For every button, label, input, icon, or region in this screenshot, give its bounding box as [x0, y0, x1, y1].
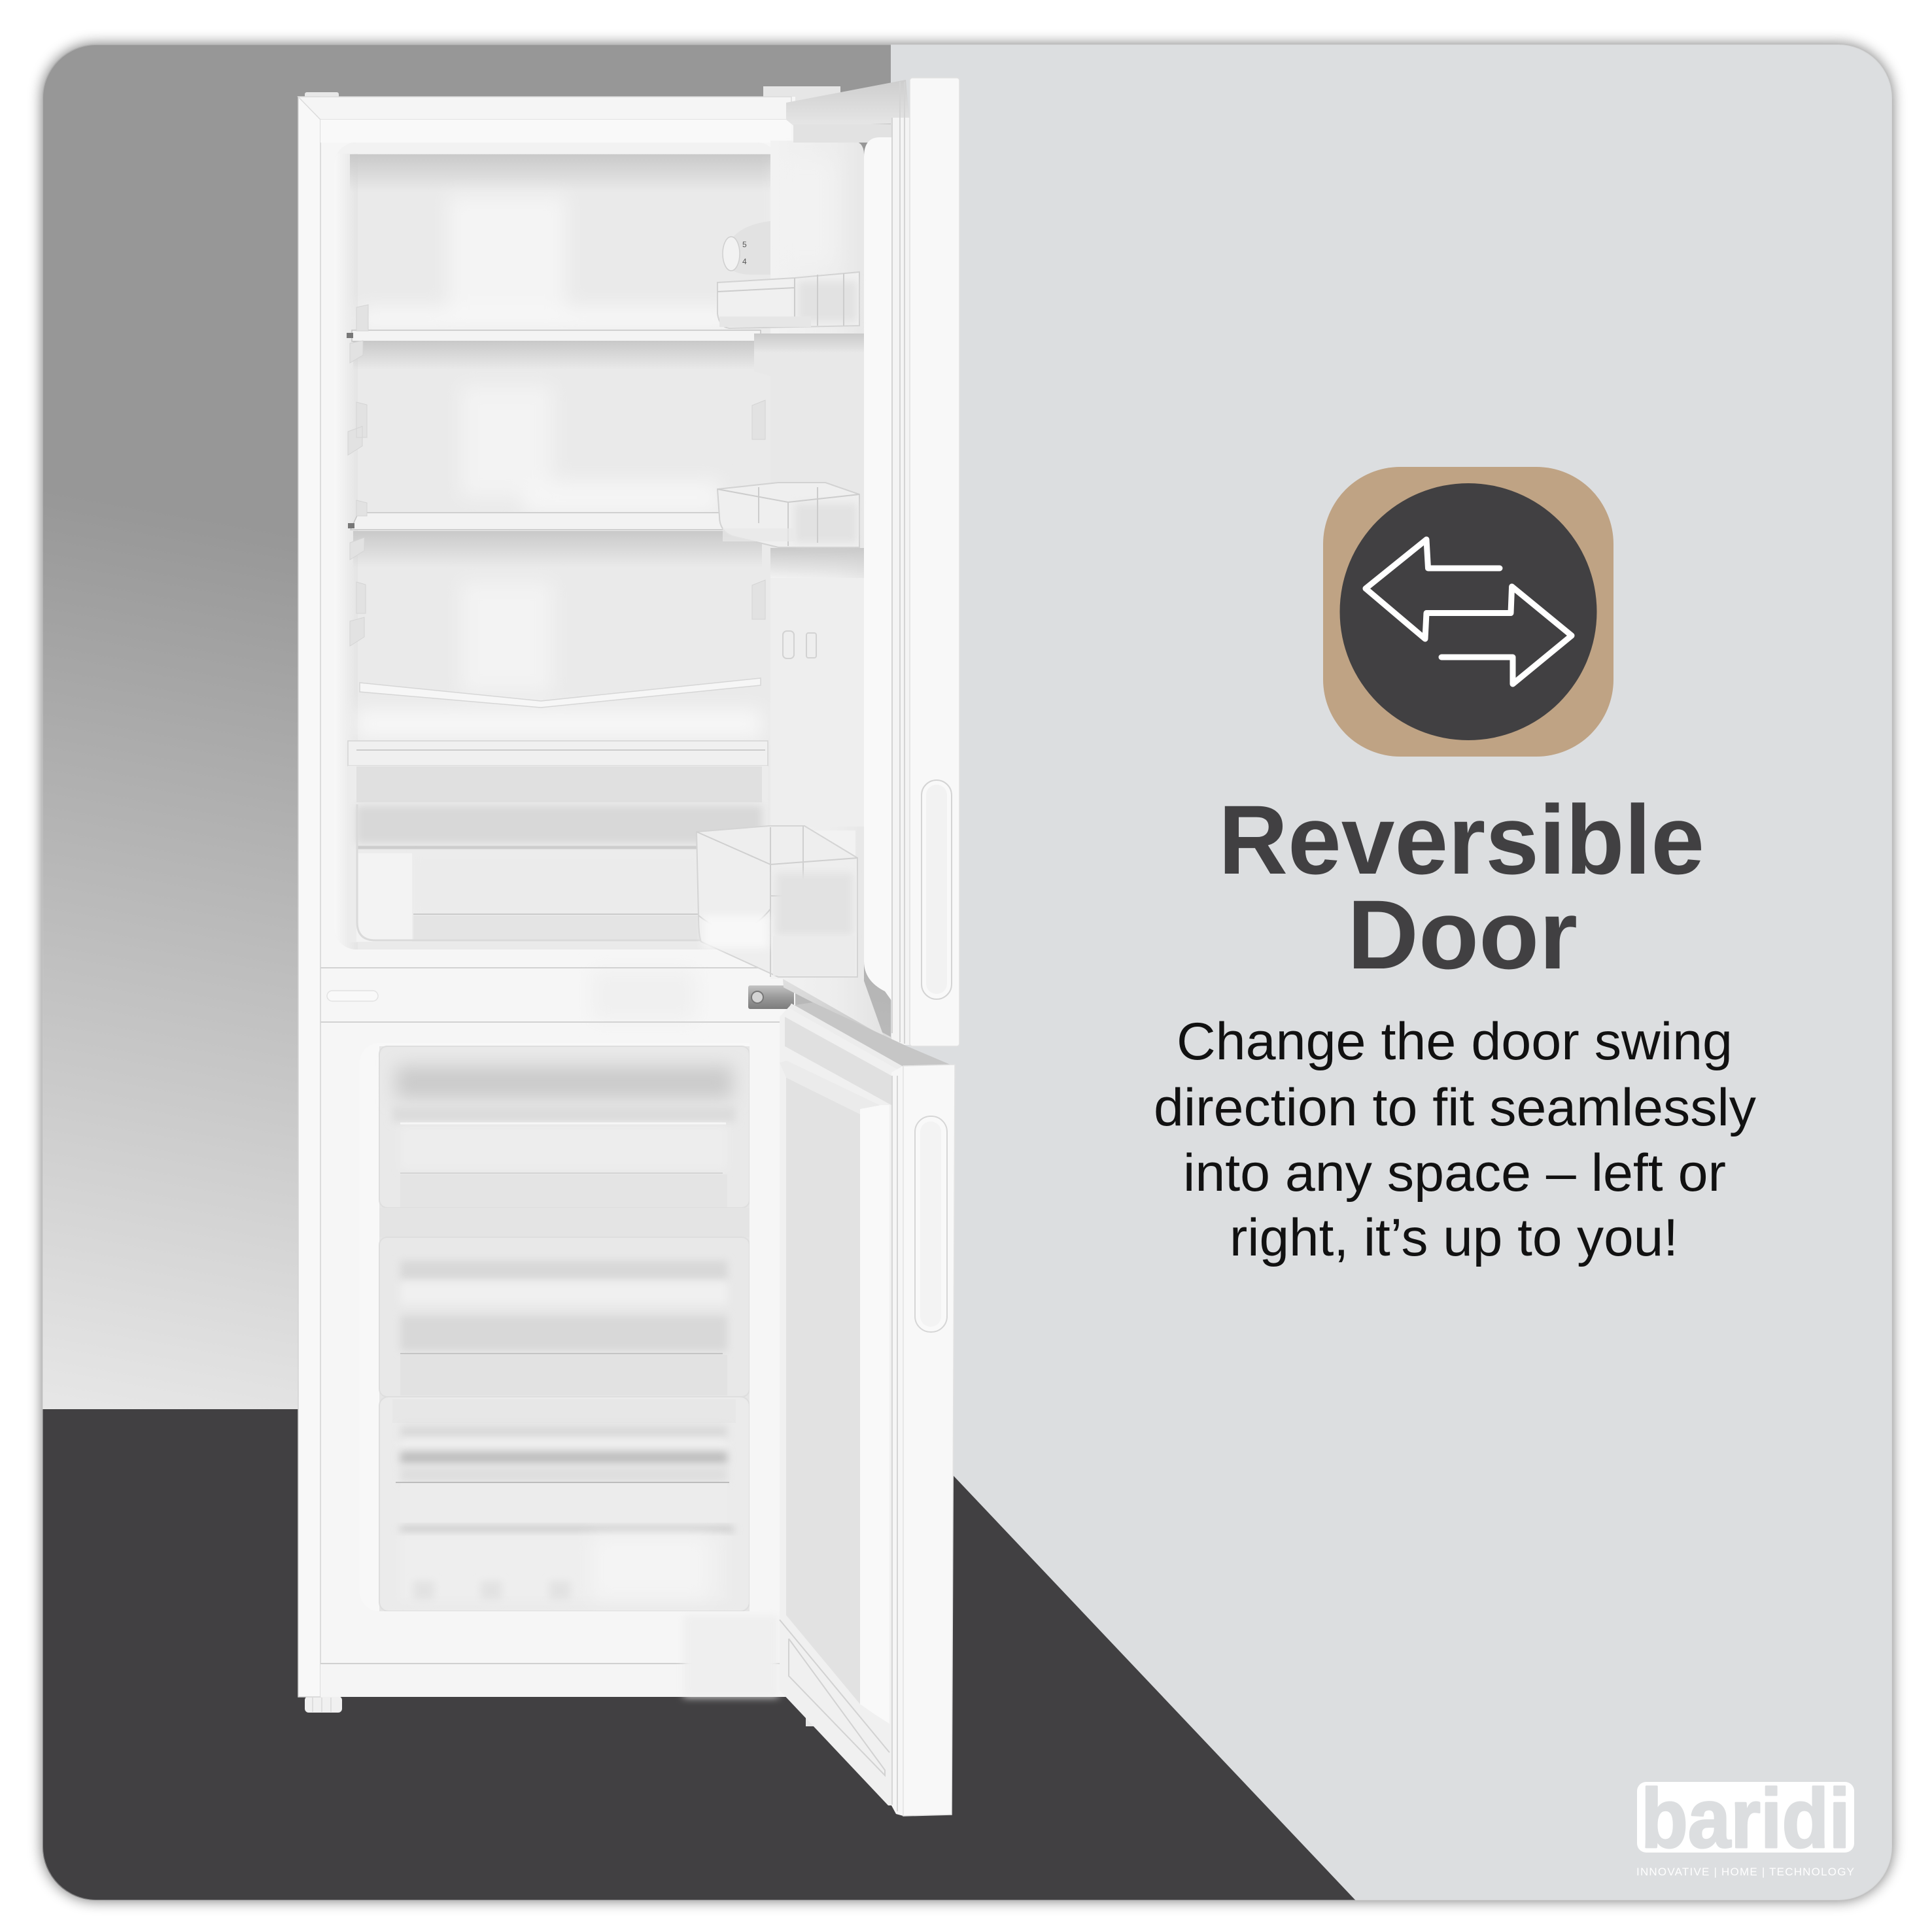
logo wordmark: baridi: [1641, 1772, 1850, 1866]
crisper shelf: [348, 741, 768, 766]
refrigerator compartment: [334, 143, 779, 949]
upper door handle: [922, 780, 952, 999]
logo plate: [1637, 1782, 1854, 1853]
icon badge: [1323, 467, 1613, 757]
door bin 2: [717, 483, 859, 547]
icon: reversible door arrows: [1323, 467, 1613, 757]
heading: Reversible: [1218, 785, 1704, 895]
top hinge cover: [763, 86, 840, 102]
brand logo: [1636, 1772, 1854, 1878]
glass cover plate: [360, 678, 761, 708]
door top edge: [786, 80, 910, 126]
door gasket: [891, 82, 910, 1045]
mid divider: [320, 968, 785, 1022]
lower door front: [903, 1065, 955, 1816]
lower door liner: [786, 1076, 860, 1704]
description: direction to fit seamlessly: [1154, 1078, 1757, 1137]
top shadow: [350, 154, 770, 183]
lower door lip: [860, 1105, 889, 1724]
description: [1154, 1012, 1757, 1267]
door front: [910, 78, 959, 1046]
cabinet body: [298, 97, 795, 1697]
shelf shadows: [353, 341, 754, 363]
lower door: [780, 1002, 955, 1816]
description: Change the door swing: [1177, 1012, 1733, 1071]
lower door handle: [915, 1116, 947, 1332]
freezer drawer 3: [379, 1397, 750, 1611]
refrigerator: [298, 78, 959, 1816]
freezer drawer 1: [379, 1046, 750, 1208]
shelf supports: [348, 305, 765, 646]
door bin 1: [717, 272, 859, 328]
temperature dial: 4: [742, 257, 747, 266]
door underside: [783, 979, 908, 1049]
middle glass shelf: [348, 513, 726, 530]
temperature dial: [723, 221, 770, 275]
logo tagline: INNOVATIVE | HOME | TECHNOLOGY: [1636, 1866, 1854, 1878]
heading: Door: [1347, 880, 1578, 989]
lower door top surface: [790, 1002, 950, 1067]
lower door bottom lines: [780, 1620, 889, 1775]
door inner liner: [770, 141, 889, 1040]
adjustable foot: [305, 1696, 342, 1713]
icon circle: [1339, 483, 1597, 740]
crisper drawer: [348, 766, 768, 942]
freezer drawer 2: [379, 1237, 750, 1397]
description: into any space – left or: [1183, 1144, 1726, 1203]
upper door: [754, 78, 959, 1049]
wall gradient: [43, 44, 958, 1418]
heading: [1218, 785, 1704, 989]
freezer compartment: [360, 1043, 772, 1611]
icon arrows: [1366, 539, 1572, 684]
temperature dial: 5: [742, 240, 747, 249]
lower door gasket: [891, 1066, 903, 1816]
door lip: [864, 137, 891, 1000]
door foot: [806, 1707, 815, 1726]
light patches: [356, 196, 762, 738]
middle door hinge: [748, 985, 794, 1009]
floor: [43, 1409, 1416, 1906]
right light panel: [891, 39, 1897, 1906]
top glass shelf: [347, 330, 761, 341]
top trim: [305, 92, 339, 98]
door bin 3: [697, 826, 857, 977]
lower door frame: [780, 1006, 901, 1805]
door liner clips: [783, 631, 816, 658]
door liner shading: [754, 160, 864, 974]
description: right, it’s up to you!: [1230, 1208, 1678, 1267]
